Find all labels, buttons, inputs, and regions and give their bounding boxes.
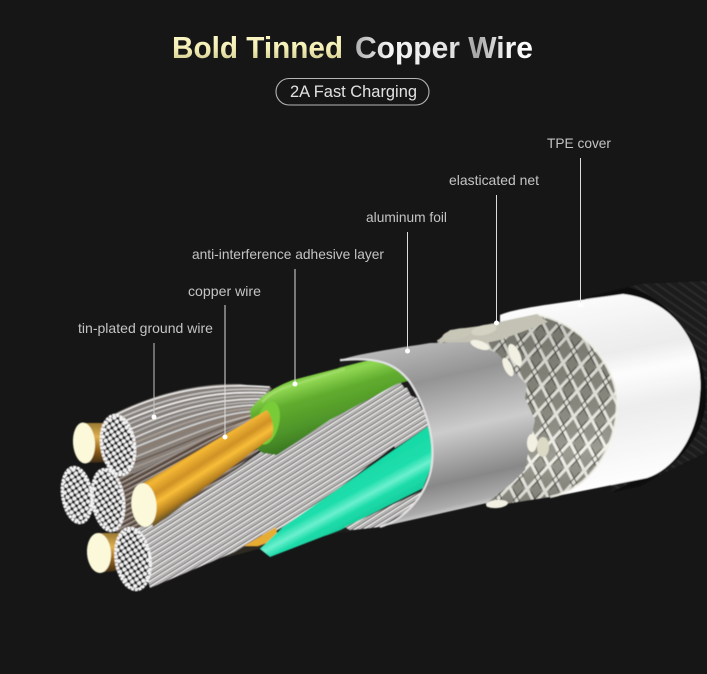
lower-back strand bundle xyxy=(85,410,274,535)
label: TPE cover xyxy=(547,135,611,308)
strand face 1 xyxy=(97,413,139,477)
big copper wire xyxy=(130,410,273,528)
elasticated net braid xyxy=(437,314,617,507)
opening behind wires xyxy=(300,358,435,540)
label: elasticated net: elasticated net xyxy=(449,172,539,188)
strand cut ends at foil opening xyxy=(372,382,431,448)
label: aluminum foil: aluminum foil xyxy=(366,209,447,225)
label: elasticated net xyxy=(449,172,539,326)
label: copper wire: copper wire xyxy=(188,283,261,299)
badge: 2A Fast Charging: 2A Fast Charging xyxy=(290,83,417,101)
tin-plated ground wire bundle: lower xyxy=(132,382,428,588)
title xyxy=(172,30,533,65)
title: Bold Tinned xyxy=(172,30,343,65)
label: anti-interference adhesive layer xyxy=(192,246,384,386)
strand face 4 xyxy=(112,526,154,592)
aluminum foil xyxy=(340,342,535,527)
label: tin-plated ground wire xyxy=(78,320,213,420)
label: TPE cover: TPE cover xyxy=(547,135,611,151)
strand face 3 xyxy=(88,467,128,533)
title: Copper Wire xyxy=(355,30,533,65)
green insulated wire xyxy=(250,358,410,455)
label: aluminum foil xyxy=(366,209,447,354)
back copper stub: upper xyxy=(72,422,110,464)
badge: 2A Fast Charging xyxy=(276,78,429,105)
label: copper wire xyxy=(188,283,261,440)
teal insulated wire xyxy=(260,425,435,557)
strands below teal xyxy=(345,490,424,530)
copper wire under teal xyxy=(225,527,278,558)
white TPE cover xyxy=(500,294,701,497)
back copper stub: lower xyxy=(86,532,122,574)
strand face 2 xyxy=(59,465,95,525)
tin-plated ground wire bundle: upper xyxy=(110,384,272,474)
black braided outer cable xyxy=(585,281,707,492)
net wire blobs at foil edge xyxy=(441,322,549,509)
label: anti-interference adhesive layer: anti-interference adhesive layer xyxy=(192,246,384,262)
label: tin-plated ground wire: tin-plated ground wire xyxy=(78,320,213,336)
cable illustration xyxy=(59,281,707,592)
